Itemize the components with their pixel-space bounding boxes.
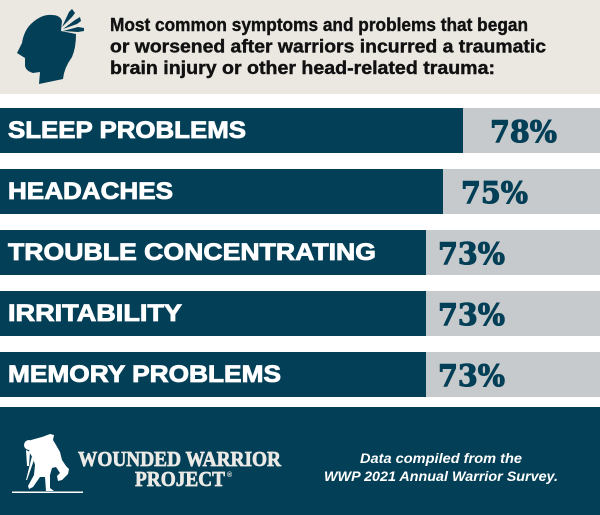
logo wordmark (78, 447, 282, 491)
bar: irritability 73%: 73% (438, 298, 505, 333)
bar: sleep problems 78% (0, 108, 600, 153)
heading text: brain injury or other head-related trauma: (110, 58, 495, 78)
panel: header (0, 0, 600, 94)
bar: irritability 73% (0, 291, 600, 336)
bar: trouble concentrating 73%: TROUBLE CONCENTRATING (8, 239, 376, 266)
source note (324, 450, 558, 484)
bar: trouble concentrating 73%: 73% (438, 237, 505, 272)
heading text: Most common symptoms and problems that began (110, 15, 528, 35)
bar: sleep problems 78%: 78% (490, 115, 557, 150)
panel: footer (0, 407, 600, 515)
bar: memory problems 73%: MEMORY PROBLEMS (8, 361, 281, 388)
heading text: or worsened after warriors incurred a traumatic (110, 36, 546, 56)
bar: memory problems 73%: 73% (438, 359, 505, 394)
bar: trouble concentrating 73% (0, 230, 600, 275)
bar: sleep problems 78%: SLEEP PROBLEMS (8, 117, 246, 144)
icon: head with impact (17, 9, 84, 84)
logo wordmark: PROJECT (135, 467, 225, 491)
bar: irritability 73%: IRRITABILITY (8, 300, 182, 327)
logo wordmark: WOUNDED WARRIOR (78, 447, 282, 471)
bar: headaches 75%: 75% (461, 176, 528, 211)
heading text (110, 15, 546, 78)
source note: WWP 2021 Annual Warrior Survey. (324, 468, 558, 484)
bar: headaches 75%: HEADACHES (8, 178, 173, 205)
source note: Data compiled from the (360, 450, 522, 466)
logo wordmark: ® (227, 471, 233, 479)
bar: headaches 75% (0, 169, 600, 214)
icon: soldier carrying comrade logo (12, 434, 83, 493)
bar: memory problems 73% (0, 352, 600, 397)
